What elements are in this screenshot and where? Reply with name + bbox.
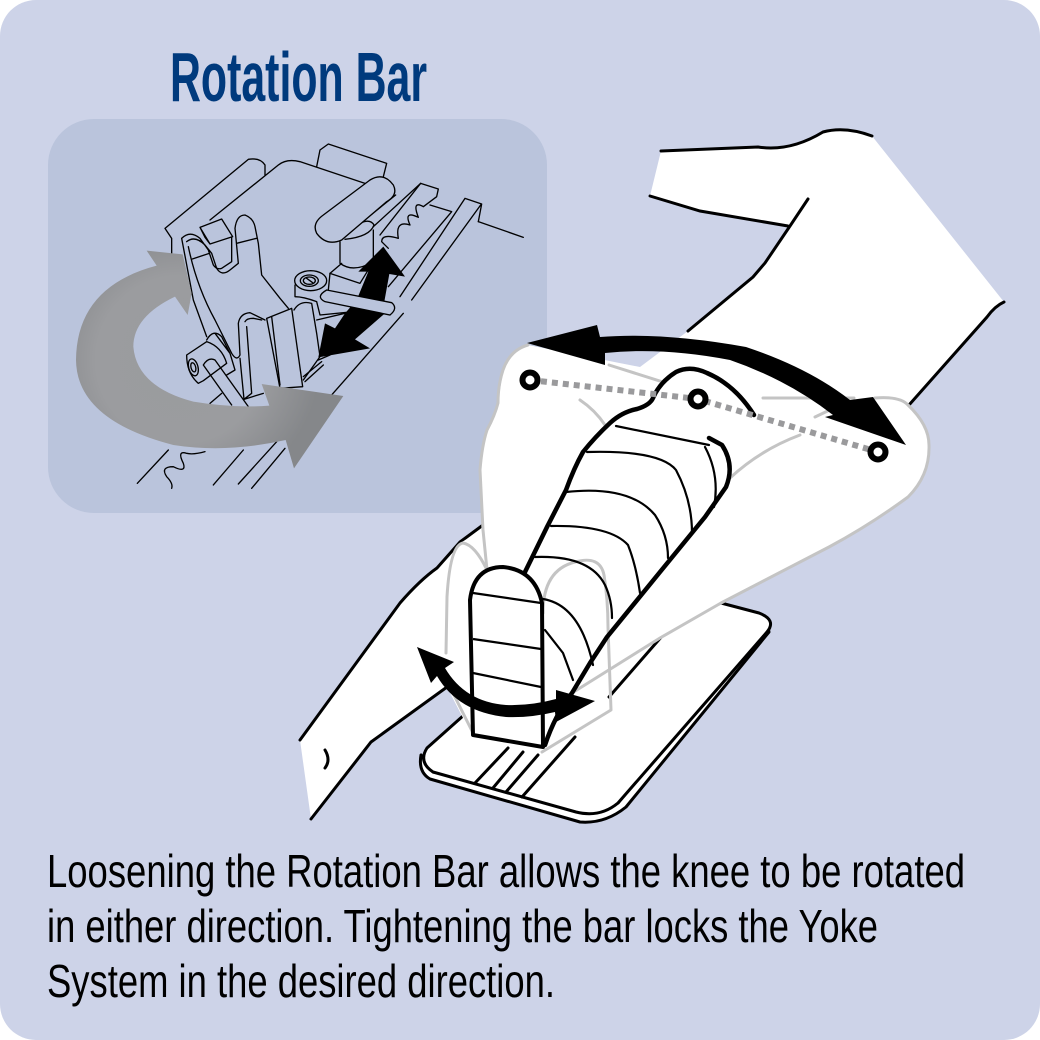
lower leg (300, 525, 500, 819)
inset line drawing (137, 144, 523, 488)
arrow: vertical black double arrow (318, 247, 405, 357)
thigh (640, 130, 1004, 460)
description text: System in the desired direction. (47, 955, 555, 1007)
knee (445, 345, 929, 752)
description text (47, 845, 965, 1007)
dotted alignment line (530, 380, 878, 452)
tibia and ankle (525, 369, 754, 745)
arrow: large double arc (527, 325, 906, 445)
big toe (470, 567, 543, 747)
inset panel: mechanism detail (48, 119, 547, 513)
thigh outlines (650, 130, 1004, 405)
title: Rotation Bar (170, 38, 427, 116)
knee grey outlines (446, 345, 929, 752)
rotation points (522, 372, 886, 460)
foot plate (420, 603, 771, 822)
illustration: leg and foot on plate (300, 130, 1004, 822)
lower leg outlines (300, 525, 483, 819)
arrow: small double arc (417, 647, 595, 722)
arrow: grey curved rotation arrow (76, 251, 343, 468)
